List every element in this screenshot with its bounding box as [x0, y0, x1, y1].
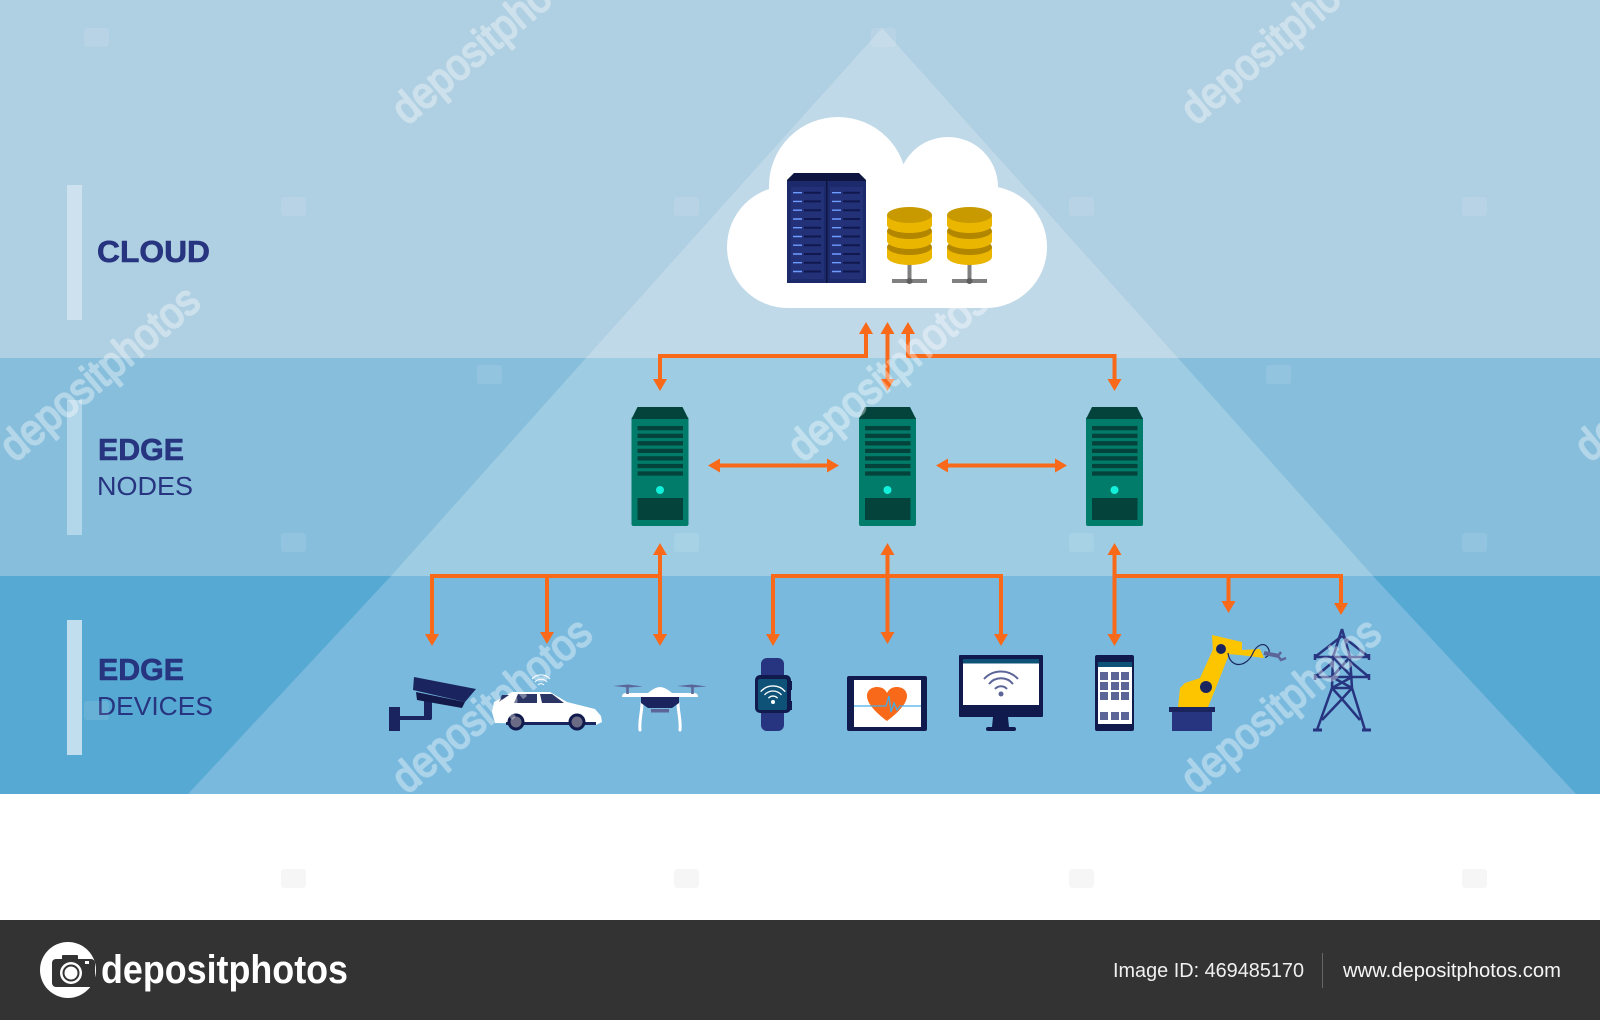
watermark: repeated diagonal stock text — [0, 0, 1600, 803]
icon: database two — [947, 207, 992, 284]
icon: connected car — [492, 675, 602, 730]
icon: desktop monitor — [959, 655, 1043, 731]
footer bar — [0, 920, 1600, 1020]
label: cloud: CLOUD — [97, 234, 210, 269]
footer logo: wordmark: depositphotos — [101, 948, 348, 992]
watermark: repeated diagonal stock text: depositphotos — [778, 276, 997, 471]
watermark: small camera marks — [84, 28, 1487, 720]
icon: industrial robot arm — [1169, 635, 1286, 731]
pyramid: overlay triangle across the three layers — [188, 28, 1576, 794]
label: edge devices — [67, 620, 213, 755]
watermark: repeated diagonal stock text: depositphotos — [1171, 608, 1390, 803]
icon: edge node server center — [859, 407, 916, 526]
watermark: repeated diagonal stock text: depositphotos — [382, 608, 601, 803]
panel: white strip below the diagram — [0, 794, 1600, 920]
label: edge nodes: NODES — [97, 471, 193, 501]
band: cloud layer background — [0, 0, 1600, 358]
icon: database one — [887, 207, 932, 284]
icon: edge node server right — [1086, 407, 1143, 526]
icon: security camera — [389, 677, 476, 731]
label: edge devices: DEVICES — [97, 691, 213, 721]
label: edge devices: EDGE — [98, 652, 184, 687]
icon: drone — [613, 684, 707, 730]
icon: edge node server left — [632, 407, 688, 526]
band: edge nodes layer background — [0, 358, 1600, 576]
label: edge nodes: EDGE — [98, 432, 184, 467]
icon: tablet with heart monitor — [847, 676, 927, 731]
arrows: cloud to edge nodes — [653, 322, 1122, 391]
icon: smartphone — [1095, 655, 1134, 731]
icon: cloud shape — [727, 117, 1047, 308]
footer logo: camera badge — [40, 942, 96, 998]
arrows: between edge nodes — [708, 458, 1067, 472]
label: edge nodes — [67, 400, 193, 535]
footer: website: www.depositphotos.com — [1342, 960, 1561, 982]
icon: server rack — [787, 173, 866, 283]
arrows: edge nodes to devices — [425, 543, 1348, 646]
band: edge devices layer background — [0, 576, 1600, 794]
footer: divider — [1322, 953, 1323, 988]
footer: image id: Image ID: 469485170 — [1113, 960, 1304, 982]
icon: smart watch — [755, 658, 792, 731]
watermark: small camera marks on white strip — [281, 869, 1487, 888]
icon: electricity pylon — [1313, 629, 1371, 730]
label: cloud — [67, 185, 210, 320]
